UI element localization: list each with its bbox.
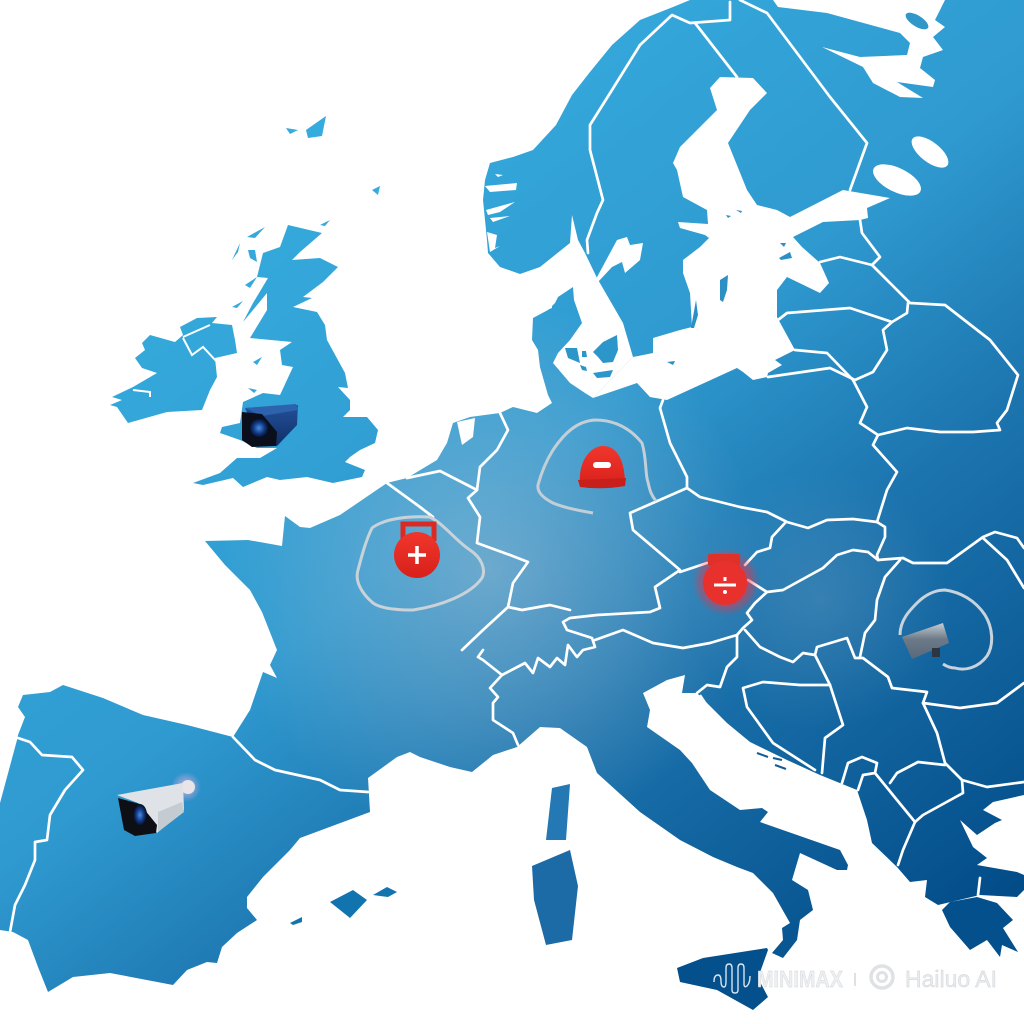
lens	[249, 418, 269, 438]
logo wave	[714, 964, 750, 993]
landmass: Ireland	[110, 317, 237, 423]
red disc	[394, 532, 440, 578]
icon: white bullet camera over Spain	[117, 772, 201, 836]
red cap	[580, 446, 625, 488]
White Sea and northern waters	[773, 0, 945, 98]
island: Peloponnese	[942, 897, 1018, 957]
Baltic Sea and Gulf of Bothnia	[593, 77, 890, 400]
Norwegian fjords	[485, 174, 517, 252]
island: Corsica	[546, 784, 570, 840]
glow	[171, 772, 201, 802]
island: Sardinia	[532, 850, 578, 945]
Irish border	[133, 325, 217, 397]
island: Sicily	[677, 948, 768, 1010]
mount	[181, 780, 195, 794]
clip	[708, 554, 740, 566]
blue peninsula inside White Sea	[903, 9, 931, 33]
Adriatic islands	[757, 753, 786, 769]
Hailuo logo	[871, 966, 893, 988]
lens	[133, 804, 147, 826]
icon: wire and red cap over Germany	[538, 420, 656, 513]
camera body	[245, 405, 298, 446]
lake: Onega	[868, 158, 926, 202]
icon: wire and red plus badge over France	[357, 517, 484, 610]
clip	[403, 524, 434, 541]
wire loop	[900, 590, 992, 669]
wire loop	[357, 517, 484, 610]
lake: Vanern	[596, 237, 643, 282]
small northern islands	[286, 116, 380, 195]
Zuiderzee inlet	[457, 418, 475, 445]
camera body	[902, 623, 949, 659]
island: Balearics	[290, 887, 397, 925]
MINIMAX: MINIMAX	[757, 966, 844, 992]
north Jutland fjord	[533, 303, 552, 315]
glow	[692, 548, 760, 616]
landmass: Great Britain	[193, 225, 378, 487]
front housing	[118, 798, 157, 836]
plus glyph	[408, 546, 426, 564]
Croatian coast strips	[692, 695, 718, 722]
glyph	[714, 577, 736, 585]
body	[117, 783, 184, 833]
icon: red badge with glow over Austria	[692, 548, 760, 616]
wire loop	[538, 420, 656, 513]
icon: grey camera and wire over Romania	[900, 590, 992, 669]
red disc	[703, 561, 747, 605]
Baltic islands	[667, 210, 792, 365]
separator	[854, 973, 856, 986]
Scottish islands	[232, 220, 330, 393]
watermark	[714, 964, 997, 993]
cap mark	[593, 462, 611, 468]
Hailuo AI: Hailuo AI	[905, 966, 997, 992]
lake: Ladoga	[907, 131, 953, 173]
Danish islands	[565, 335, 618, 378]
icon: blue camera on Wales	[242, 404, 298, 447]
